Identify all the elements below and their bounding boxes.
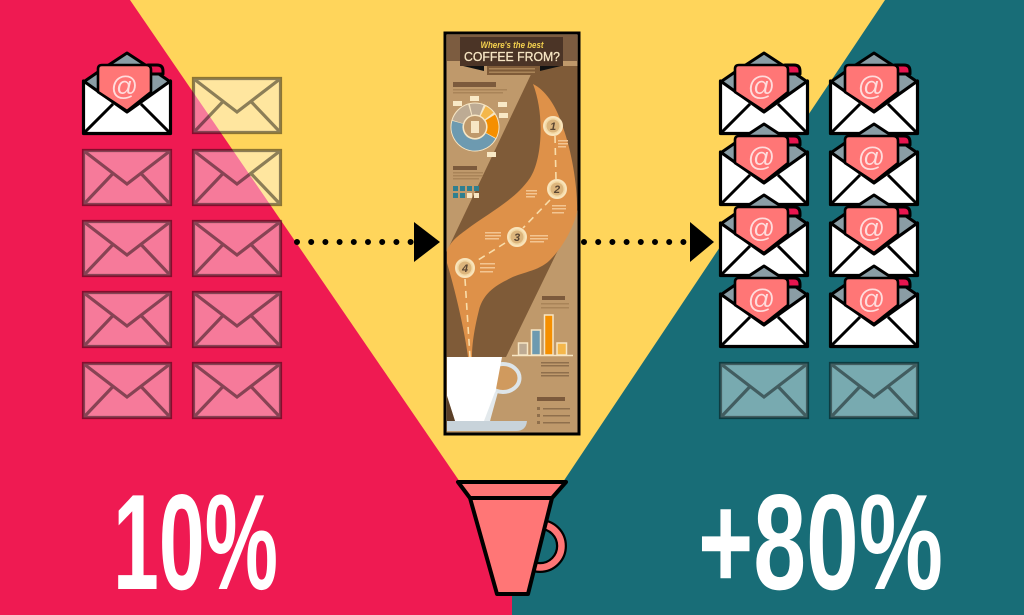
step marker 4: 4: [461, 263, 468, 275]
icon: open email envelope: [830, 195, 918, 276]
icon: closed envelope faded: [84, 292, 170, 346]
step marker 4: [456, 259, 474, 277]
icon: open email envelope: @: [748, 71, 775, 101]
panel: teal triangle background: [512, 0, 1024, 615]
icon: open email envelope: @: [858, 142, 885, 172]
icon: closed envelope faded: [194, 78, 280, 132]
icon: open email envelope: @: [748, 213, 775, 243]
icon: closed envelope faded: [194, 292, 280, 346]
icon: closed envelope faded: [830, 364, 918, 418]
stat: 10 percent: 10%: [113, 466, 278, 615]
coffee cup: [447, 355, 527, 431]
icon: open email envelope: [84, 53, 170, 134]
icon: open email envelope: [830, 124, 918, 204]
icon: open email envelope: [830, 53, 918, 134]
text block with pictogram squares: [453, 166, 483, 198]
arrow: left dotted arrow: [297, 222, 440, 262]
icon: funnel cup: [458, 482, 566, 594]
step marker 3: [508, 228, 526, 246]
icon: closed envelope faded: [720, 364, 808, 418]
icon: open email envelope: [720, 266, 808, 346]
icon: open email envelope: @: [748, 284, 775, 314]
icon: closed envelope faded: [84, 364, 170, 418]
donut chart: [450, 96, 508, 157]
icon: open email envelope: @: [111, 71, 138, 101]
step marker 1: 1: [550, 121, 556, 133]
bar chart: [512, 315, 573, 356]
step marker 1: [544, 117, 562, 135]
icon: closed envelope faded: [84, 222, 170, 276]
dashed route: [465, 136, 556, 357]
icon: open email envelope: [720, 124, 808, 204]
icon: open email envelope: @: [748, 142, 775, 172]
icon: closed envelope faded: [84, 150, 170, 204]
icon: open email envelope: @: [858, 71, 885, 101]
text lines top left: [453, 82, 507, 94]
arrow: right dotted arrow: [584, 222, 714, 262]
icon: open email envelope: @: [858, 284, 885, 314]
bar chart heading: [541, 296, 569, 308]
thumbnail border: [445, 33, 579, 434]
icon: open email envelope: @: [858, 213, 885, 243]
title line one: Where's the best: [480, 40, 544, 50]
icon: closed envelope faded: [194, 150, 280, 204]
step marker 2: [548, 180, 566, 198]
step marker 3: 3: [514, 232, 520, 244]
panel: coffee infographic thumbnail: [445, 33, 579, 434]
icon: closed envelope faded: [194, 364, 280, 418]
right envelope grid: [720, 53, 918, 418]
header ribbon: [447, 35, 577, 75]
left envelope grid: [84, 53, 280, 418]
icon: open email envelope: [720, 195, 808, 276]
lines and list bottom right: [537, 362, 570, 424]
icon: closed envelope faded: [194, 222, 280, 276]
step captions: [480, 140, 568, 272]
panel: red triangle background: [0, 0, 512, 615]
orange coffee swoosh: [447, 84, 577, 357]
diagonal brown band: [446, 66, 579, 357]
icon: open email envelope: [830, 266, 918, 346]
step marker 2: 2: [553, 184, 560, 196]
title line two: COFFEE FROM?: [464, 49, 560, 64]
icon: open email envelope: [720, 53, 808, 134]
